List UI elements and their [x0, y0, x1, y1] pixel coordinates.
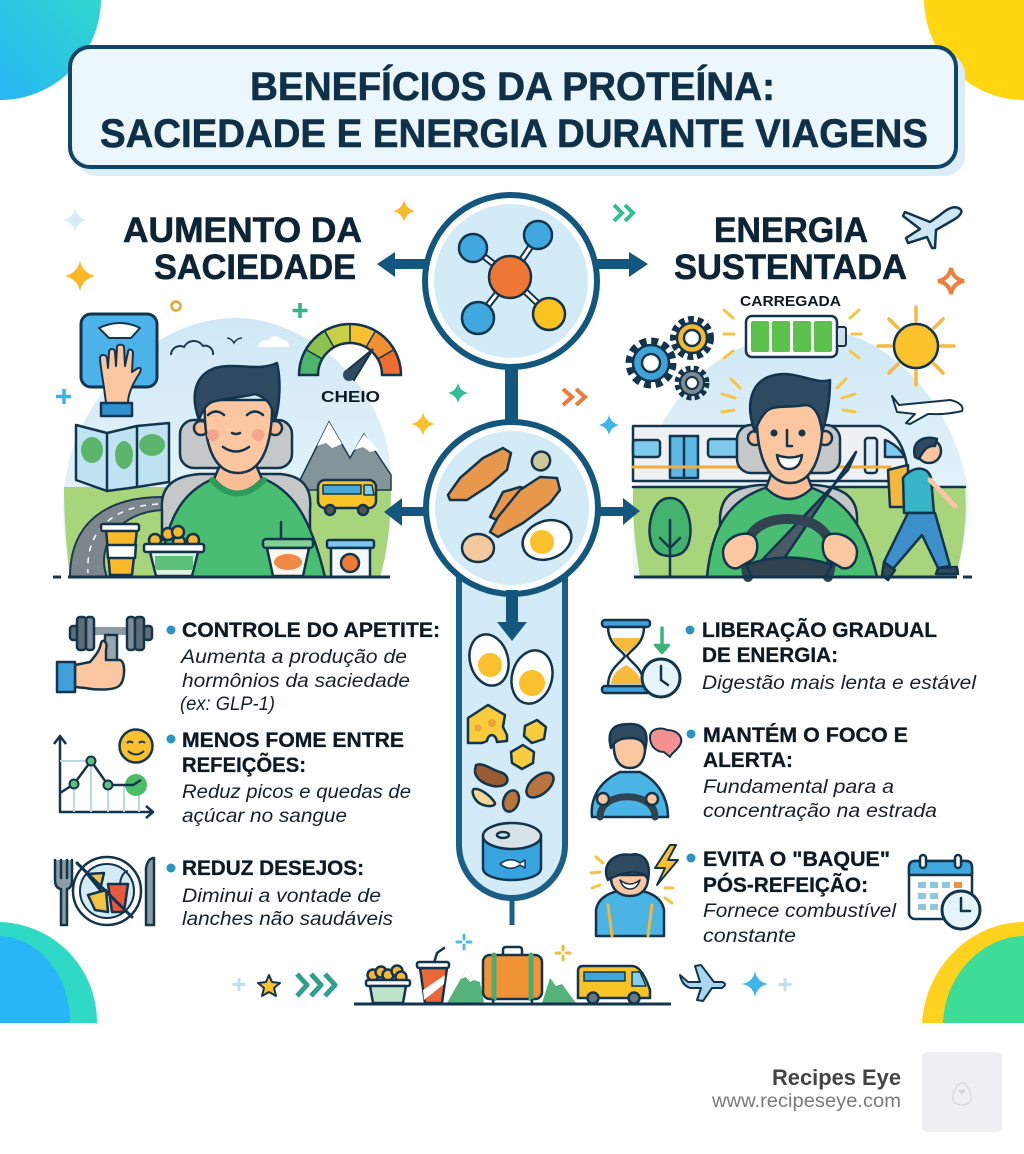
text block: controle do apetite: Aumenta a produção de	[180, 646, 407, 668]
drink cup	[417, 948, 449, 1003]
text block: controle do apetite: (ex: GLP-1)	[180, 693, 275, 715]
footer brand	[711, 1065, 901, 1112]
icon: hourglass and clock	[602, 620, 680, 697]
gear: yellow	[674, 320, 710, 356]
icon: map	[76, 423, 169, 491]
decorative corner: top left	[0, 0, 101, 100]
icon: gears	[630, 320, 710, 397]
panel: energia illustration	[630, 207, 972, 580]
sky background	[633, 331, 968, 577]
icon: hand on scale	[81, 314, 157, 416]
title text	[100, 64, 928, 156]
battery: carregada	[724, 293, 861, 358]
heading: energia sustentada	[674, 211, 907, 287]
baseline	[53, 576, 390, 578]
connector between circles	[505, 365, 518, 425]
text block: evita o baque: PÓS-REFEIÇÃO:	[703, 873, 868, 897]
text block: evita o baque: Fornece combustível	[703, 900, 897, 922]
chicken strip two	[490, 487, 530, 520]
text block: liberação gradual: Digestão mais lenta e estável	[702, 672, 977, 694]
text block: liberação gradual: LIBERAÇÃO GRADUAL	[702, 619, 937, 642]
circle: protein foods	[426, 422, 598, 594]
icon: smiley	[120, 730, 152, 762]
chevrons	[297, 974, 335, 996]
capsule tube	[459, 570, 565, 925]
icon: bus	[318, 480, 376, 515]
icon: plane	[680, 965, 725, 1001]
text block: reduz desejos: lanches não saudáveis	[182, 908, 393, 930]
heading: energia sustentada: SUSTENTADA	[674, 248, 907, 287]
text block: evita o baque	[686, 848, 897, 947]
panel: saciedade illustration	[53, 314, 401, 577]
seat and headrest	[720, 425, 857, 540]
sky background	[63, 318, 391, 577]
text block: reduz desejos	[166, 857, 393, 930]
ground line	[354, 1002, 671, 1006]
title banner	[70, 47, 965, 176]
text block: menos fome: MENOS FOME ENTRE	[182, 729, 404, 752]
person: walker	[882, 438, 958, 580]
text block: reduz desejos: Diminui a vontade de	[182, 885, 381, 907]
mountains	[295, 422, 391, 490]
footer brand: Recipes Eye	[772, 1065, 901, 1090]
boiled egg	[517, 514, 577, 566]
text block: mantém o foco: Fundamental para a	[703, 776, 894, 798]
food: nuggets bowl	[144, 526, 204, 576]
head energy rays	[722, 379, 855, 412]
road	[70, 497, 162, 577]
circle: protein molecule	[425, 195, 597, 367]
text block: menos fome	[166, 729, 411, 827]
train	[633, 426, 965, 487]
text block: controle do apetite	[166, 619, 440, 715]
decorative corner: top right	[924, 0, 1024, 100]
icon: tree	[650, 498, 690, 575]
title text: BENEFÍCIOS DA PROTEÍNA:	[250, 64, 775, 109]
tuna can	[483, 823, 541, 880]
gear: blue	[630, 342, 672, 384]
bottom travel strip	[232, 935, 792, 1004]
icon: blood sugar chart	[54, 730, 153, 818]
arrow inside tube	[497, 590, 527, 641]
icon: brain	[650, 728, 681, 757]
gear: grey	[678, 369, 706, 397]
clouds	[171, 336, 289, 355]
heading: aumento da saciedade	[123, 211, 362, 287]
text block: mantém o foco: ALERTA:	[703, 749, 793, 772]
sun	[878, 307, 954, 385]
ground	[64, 487, 391, 577]
text block: liberação gradual	[686, 619, 977, 694]
arrows from food circle	[384, 498, 640, 526]
text block: menos fome: Reduz picos e quedas de	[182, 781, 411, 803]
molecule	[459, 221, 565, 334]
chicken strip three	[490, 477, 560, 537]
sparkles and star	[232, 935, 792, 997]
footer logo box	[922, 1052, 1002, 1132]
title text: SACIEDADE E ENERGIA DURANTE VIAGENS	[100, 112, 928, 156]
battery label: CARREGADA	[740, 293, 841, 310]
heading: aumento da saciedade: AUMENTO DA	[123, 211, 362, 250]
text block: mantém o foco: MANTÉM O FOCO E	[703, 724, 908, 747]
nuts	[473, 764, 558, 814]
text block: reduz desejos: REDUZ DESEJOS:	[182, 857, 364, 880]
text block: liberação gradual: DE ENERGIA:	[702, 644, 838, 667]
decorative corner: bottom left	[0, 922, 97, 1023]
egg halves	[464, 630, 558, 708]
icon: no snacks plate	[55, 857, 154, 925]
suitcase	[483, 947, 542, 1002]
bus	[578, 966, 650, 1004]
text block: evita o baque: EVITA O "BAQUE"	[703, 848, 890, 871]
seed	[528, 448, 554, 474]
egg	[462, 534, 494, 562]
ground	[633, 487, 966, 577]
text block: controle do apetite: hormônios da saciedade	[182, 670, 410, 692]
text block: mantém o foco: concentração na estrada	[703, 800, 937, 822]
icon: calendar with clock	[909, 855, 980, 929]
food bowl	[366, 966, 410, 1003]
baseline	[634, 576, 972, 578]
person: driver	[707, 374, 877, 577]
text block: menos fome: açúcar no sangue	[182, 805, 347, 827]
text block: mantém o foco	[686, 724, 937, 822]
food: apple jar	[327, 540, 374, 577]
gauge: cheio	[299, 324, 401, 406]
icon: energised traveller	[591, 845, 678, 936]
text block: controle do apetite: CONTROLE DO APETITE:	[182, 619, 440, 642]
text block: menos fome: REFEIÇÕES:	[182, 753, 306, 777]
food: cup	[101, 524, 139, 575]
decorative sparkles	[56, 200, 964, 436]
gauge label: CHEIO	[321, 389, 380, 406]
heading: aumento da saciedade: SACIEDADE	[154, 248, 356, 287]
icon: small plane	[892, 396, 962, 424]
cheese	[468, 705, 546, 769]
heading: energia sustentada: ENERGIA	[714, 211, 868, 250]
decorative corner: bottom right	[922, 922, 1024, 1023]
seat	[162, 420, 310, 540]
arrows from protein circle	[377, 252, 648, 277]
icon: plane top right	[903, 207, 961, 248]
icon: dumbbell thumbs up	[57, 617, 152, 692]
chicken strip one	[448, 448, 511, 500]
food: lunch box	[263, 522, 313, 576]
icon: focused driver	[592, 724, 681, 817]
mountains	[447, 968, 576, 1003]
person: smiling traveller	[160, 363, 325, 577]
footer brand: www.recipeseye.com	[711, 1091, 901, 1112]
tube foods	[464, 630, 558, 880]
text block: evita o baque: constante	[703, 925, 796, 947]
